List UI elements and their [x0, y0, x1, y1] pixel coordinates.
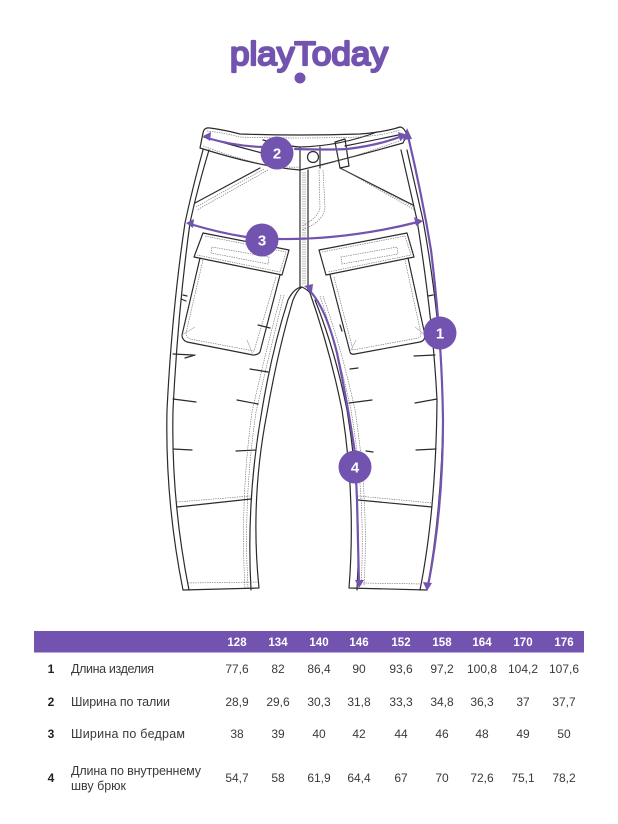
row 2: 2	[48, 695, 55, 709]
row 4: 54,7	[225, 771, 249, 785]
row 1: 1	[48, 662, 55, 676]
left cargo pocket	[182, 233, 289, 355]
row 3: 38	[230, 727, 244, 741]
row 2: 28,9	[225, 695, 249, 709]
row 1: 104,2	[508, 662, 538, 676]
row 3: 50	[557, 727, 571, 741]
table header: 140	[309, 637, 329, 649]
table header: 134	[268, 637, 288, 649]
row 2: Ширина по талии	[71, 695, 170, 709]
waistband	[200, 127, 407, 170]
measure 3: hip width	[186, 217, 423, 256]
measure 4: inseam length: 4	[351, 460, 360, 476]
measure 1: garment length	[403, 128, 456, 591]
legs outline	[167, 150, 443, 590]
measure 2: waist width: 2	[273, 146, 281, 162]
row 1	[48, 662, 579, 676]
row 3: 46	[435, 727, 449, 741]
row 2: 31,8	[347, 695, 371, 709]
row 4: 61,9	[307, 771, 331, 785]
row 2: 29,6	[266, 695, 290, 709]
logo: playToday: playToday	[230, 35, 389, 72]
row 3: 48	[475, 727, 489, 741]
measure 1: garment length: 1	[436, 326, 444, 342]
row 3: 39	[271, 727, 285, 741]
table header	[34, 631, 584, 652]
row 3: 3	[48, 727, 55, 741]
row 2: 30,3	[307, 695, 331, 709]
row 1: 107,6	[549, 662, 579, 676]
row 1: 82	[271, 662, 285, 676]
right cargo pocket	[319, 233, 425, 354]
row 4: 70	[435, 771, 449, 785]
row 1: 97,2	[430, 662, 454, 676]
row 1: 93,6	[389, 662, 413, 676]
row 4: 4	[48, 771, 55, 785]
table header: 152	[391, 637, 411, 649]
row 2: 37	[516, 695, 530, 709]
knee seams and hems	[173, 295, 437, 584]
row 3: 44	[394, 727, 408, 741]
row 1: 100,8	[467, 662, 497, 676]
row 1: Длина изделия	[71, 662, 154, 676]
row 4: Длина по внутреннему	[71, 764, 202, 778]
row 2: 34,8	[430, 695, 454, 709]
row 3: 40	[312, 727, 326, 741]
row 3: 49	[516, 727, 530, 741]
slant pockets	[195, 168, 415, 230]
button	[308, 152, 318, 162]
table header: 170	[513, 637, 533, 649]
table header: 164	[472, 637, 492, 649]
row 4: 67	[394, 771, 408, 785]
measure 4: inseam length	[304, 284, 372, 588]
row 4	[48, 764, 576, 793]
row 2	[48, 695, 576, 709]
row 4: 58	[271, 771, 285, 785]
row 4: 72,6	[470, 771, 494, 785]
row 4: шву брюк	[71, 779, 127, 793]
row 3: Ширина по бедрам	[71, 727, 185, 741]
row 4: 78,2	[552, 771, 576, 785]
table header: 146	[349, 637, 369, 649]
row 1: 90	[352, 662, 366, 676]
row 3: 42	[352, 727, 366, 741]
row 1: 77,6	[225, 662, 249, 676]
size table	[34, 631, 584, 793]
trousers line drawing	[167, 127, 443, 590]
table header: 158	[432, 637, 452, 649]
measure 3: hip width: 3	[258, 232, 266, 250]
measure 2: waist width	[203, 132, 407, 170]
row 3	[48, 727, 571, 741]
table header: 176	[554, 637, 574, 649]
row 2: 33,3	[389, 695, 413, 709]
belt loop	[335, 139, 349, 168]
row 2: 37,7	[552, 695, 576, 709]
row 4: 75,1	[511, 771, 535, 785]
row 4: 64,4	[347, 771, 371, 785]
table header: 128	[227, 637, 247, 649]
row 1: 86,4	[307, 662, 331, 676]
row 2: 36,3	[470, 695, 494, 709]
